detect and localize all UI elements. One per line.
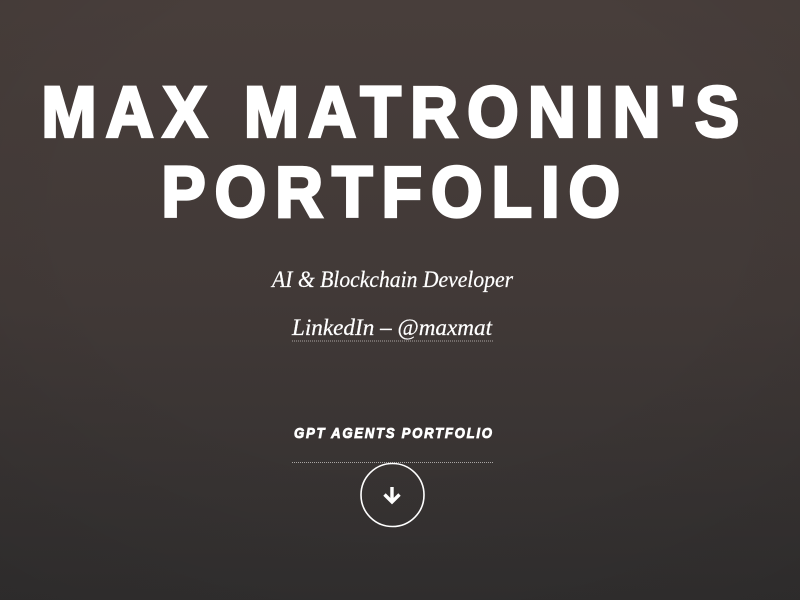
title line 1: MAX MATRONIN'S bbox=[42, 72, 739, 152]
subtitle: AI & Blockchain Developer bbox=[270, 267, 514, 292]
icon: down arrow button bbox=[361, 464, 424, 526]
title line 2: PORTFOLIO bbox=[162, 152, 620, 232]
portfolio link: GPT AGENTS PORTFOLIO bbox=[294, 424, 492, 441]
title bbox=[42, 72, 739, 232]
linkedin link: LinkedIn – @maxmat bbox=[291, 315, 493, 340]
